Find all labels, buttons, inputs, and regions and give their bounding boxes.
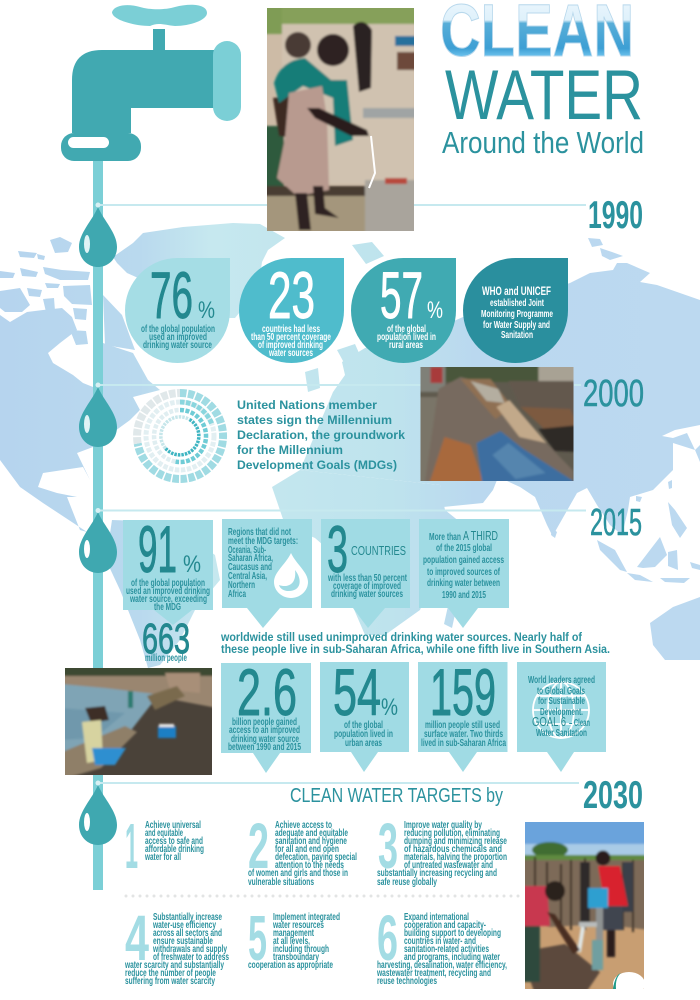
target 4: reduce the number of people xyxy=(125,968,216,979)
text: unimproved sources xyxy=(220,632,610,656)
photo: people washing at lake shore xyxy=(65,668,212,775)
title xyxy=(440,0,644,159)
target 4: withdrawals and supply xyxy=(152,944,227,955)
panel: 2015 stat 91 percent xyxy=(123,512,213,625)
panel: 2015 three countries: drinking water sources xyxy=(331,589,403,600)
target 5: 5 xyxy=(248,902,267,974)
target 3: materials, halving the proportion xyxy=(404,852,507,863)
panel: 2015 global goals: GOAL 6 xyxy=(532,715,566,729)
target 3: substantially increasing recycling and xyxy=(377,868,497,879)
icon: faucet xyxy=(61,5,241,161)
panel: 2015 stat 54 percent: population lived in xyxy=(334,729,393,740)
target 2: defecation, paying special xyxy=(275,852,357,863)
panel: 2015 stat 91 percent: used an improved drinking xyxy=(126,586,210,597)
drop icon 2015 xyxy=(79,508,117,573)
target 6: cooperation and capacity- xyxy=(404,920,486,931)
target 5: water resources xyxy=(272,920,324,931)
panel: 2015 stat 91 percent: of the global population xyxy=(131,578,205,589)
panel: 2015 global goals: World leaders agreed xyxy=(528,675,595,686)
panel: 2015 stat 54 percent: urban areas xyxy=(345,738,382,749)
panel: 2015 stat 91 percent: % xyxy=(183,551,201,578)
panel: 1990 WHO and UNICEF: Sanitation xyxy=(501,330,533,341)
target 4: 4 xyxy=(125,902,149,974)
target 2: of women and girls and those in xyxy=(248,868,348,879)
panel: 2015 stat 54 percent: % xyxy=(381,694,398,721)
panel: 2015 stat 54 percent xyxy=(320,655,409,772)
panel: 1990 WHO and UNICEF: Monitoring Programme xyxy=(481,309,553,320)
panel: 2015 a third: drinking water between xyxy=(427,578,500,589)
target 6 xyxy=(376,902,507,987)
panel: 2015 stat 159 million: surface water. Two thirds xyxy=(424,729,503,740)
target 5 xyxy=(248,902,340,974)
panel: 2015 stat 91 percent: 91 xyxy=(138,512,177,586)
stat: 663 million people: 663 xyxy=(142,615,190,663)
target 1: water for all xyxy=(144,852,181,863)
panel: 2015 global goals: to Global Goals xyxy=(537,686,585,697)
target 5: management xyxy=(273,928,314,939)
target 1 xyxy=(125,810,204,882)
panel: 1990 stat 76 percent: of the global population xyxy=(141,324,215,335)
panel: 2015 stat 2.6 billion: between 1990 and 2015 xyxy=(228,742,301,753)
panel: 1990 stat 57 percent: of the global xyxy=(387,324,426,335)
panel: 2015 global goals xyxy=(517,662,606,772)
panel: 2015 regions: Caucasus and xyxy=(228,562,272,573)
target 5: at all levels, xyxy=(273,936,310,947)
drop icon 2000 xyxy=(79,382,117,447)
panel: 1990 stat 23 countries: than 50 percent coverage xyxy=(251,332,331,343)
year 1990: 1990 xyxy=(588,194,643,237)
panel: 2015 regions: Oceania, Sub- xyxy=(228,545,266,556)
target 2: Achieve access to xyxy=(275,820,332,831)
icon: circular pattern xyxy=(132,388,228,484)
panel: 1990 stat 23 countries: 23 xyxy=(268,258,315,332)
panel: 1990 WHO and UNICEF: WHO and UNICEF xyxy=(482,284,551,298)
panel: 2015 stat 2.6 billion: drinking water source xyxy=(231,734,299,745)
target 1: access to safe and xyxy=(145,836,203,847)
target 6: building support to developing xyxy=(404,928,501,939)
target 6: wastewater treatment, recycling and xyxy=(376,968,491,979)
panel: 2015 three countries: coverage of improved xyxy=(333,581,401,592)
target 4: suffering from water scarcity xyxy=(125,976,215,987)
target 3 xyxy=(377,810,507,888)
target 1: affordable drinking xyxy=(145,844,204,855)
panel: 1990 stat 57 percent: % xyxy=(427,297,443,324)
heading: clean water targets: CLEAN WATER TARGETS by xyxy=(290,784,503,807)
icon: white water drop xyxy=(274,553,308,598)
panel: 1990 stat 57 percent: rural areas xyxy=(389,340,423,351)
panel: 2015 regions: Central Asia, xyxy=(228,571,267,582)
panel: 2015 three countries: 3 xyxy=(327,512,348,586)
panel: 2015 stat 2.6 billion: 2.6 xyxy=(237,655,297,729)
panel: 2015 stat 54 percent: of the global xyxy=(344,720,383,731)
panel: 2015 stat 159 million: lived in sub-Saharan Africa xyxy=(421,738,506,749)
target 4: across all sectors and xyxy=(153,928,222,939)
panel: 2015 regions: Saharan Africa, xyxy=(228,553,273,564)
panel: 2015 stat 2.6 billion xyxy=(221,655,311,773)
icon: globe xyxy=(533,682,589,738)
drop icon 1990 xyxy=(79,202,117,267)
timeline lines xyxy=(98,205,586,783)
panel: 1990 stat 76 percent: 76 xyxy=(150,258,193,332)
text: unimproved sources: these people live in sub-Saharan Africa, while one fifth live in Southern Asia. xyxy=(221,644,610,656)
target 4: Substantially increase xyxy=(153,912,222,923)
target 2: vulnerable situations xyxy=(248,877,314,888)
photo: damaged water pipeline xyxy=(420,367,574,481)
panel: 2015 three countries xyxy=(321,512,410,628)
target 5: including through xyxy=(273,944,329,955)
target 3: safe reuse globally xyxy=(377,877,437,888)
panel: 2015 global goals: for Sustainable xyxy=(538,696,585,707)
panel: 2015 stat 54 percent: 54 xyxy=(333,655,381,729)
panel: 1990 stat 57 percent: population lived in xyxy=(377,332,436,343)
vertical water pipe xyxy=(93,160,103,890)
target 2: for all and end open xyxy=(275,844,339,855)
text: millennium declaration: Declaration, the groundwork xyxy=(237,430,406,442)
target 4: water-use efficiency xyxy=(152,920,216,931)
target 2: adequate and equitable xyxy=(275,828,348,839)
panel: 1990 stat 23 countries: water sources xyxy=(268,348,313,359)
panel: 1990 WHO and UNICEF: for Water Supply and xyxy=(483,320,550,331)
target 4 xyxy=(124,902,229,987)
panel: 1990 stat 23 countries xyxy=(239,258,344,363)
panel: 2015 stat 91 percent: water source, exceeding xyxy=(129,594,207,605)
panel: 2015 regions: meet the MDG targets: xyxy=(228,536,298,547)
target 6: countries in water- and xyxy=(404,936,476,947)
photo: children washing hands at tap xyxy=(267,8,414,231)
target 4: water scarcity and substantially xyxy=(124,960,224,971)
panel: 1990 stat 57 percent xyxy=(351,258,456,363)
target 1: 1 xyxy=(125,810,138,882)
text: unimproved sources: worldwide still used unimproved drinking water sources. Nearly half of xyxy=(220,632,582,644)
panel: 1990 stat 57 percent: 57 xyxy=(380,258,423,332)
panel: 2015 three countries: with less than 50 percent xyxy=(327,573,407,584)
panel: 1990 stat 76 percent: drinking water source xyxy=(143,340,212,351)
year 2030: 2030 xyxy=(583,774,643,817)
target 1: Achieve universal xyxy=(145,820,201,831)
panel: 2015 global goals: Development. xyxy=(540,707,583,718)
panel: 1990 WHO and UNICEF xyxy=(463,258,568,363)
panel: 2015 stat 2.6 billion: access to an improved xyxy=(229,725,300,736)
text: millennium declaration: states sign the Millennium xyxy=(237,415,392,427)
panel: 2015 regions xyxy=(222,519,312,628)
year 2015: 2015 xyxy=(590,502,642,544)
panel: 2015 a third: to improved sources of xyxy=(427,567,500,578)
target 2 xyxy=(248,810,357,888)
target 6: Expand international xyxy=(404,912,469,923)
target 6: harvesting, desalination, water efficiency, xyxy=(377,960,507,971)
target 5: cooperation as appropriate xyxy=(248,960,333,971)
panel: 2015 a third: 1990 and 2015 xyxy=(442,590,486,601)
target 3: 3 xyxy=(378,810,398,882)
target 4: of freshwater to address xyxy=(153,952,229,963)
target 6: reuse technologies xyxy=(377,976,437,987)
panel: 2015 a third: of the 2015 global xyxy=(436,543,492,554)
title: water: WATER xyxy=(445,57,643,135)
text: millennium declaration xyxy=(237,400,406,472)
panel: 1990 stat 76 percent: used an improved xyxy=(149,332,207,343)
target 2: attention to the needs xyxy=(275,860,344,871)
target 6: sanitation-related activities xyxy=(404,944,489,955)
target 5: Implement integrated xyxy=(273,912,340,923)
panel: 2015 a third: More than xyxy=(429,532,461,543)
panel: 1990 stat 23 countries: countries had less xyxy=(262,324,320,335)
stat: 663 million people: million people xyxy=(145,653,187,664)
target 3: of hazardous chemicals and xyxy=(404,844,502,855)
panel: 2015 global goals: – Clean xyxy=(569,718,590,729)
panel: 2015 stat 91 percent: the MDG xyxy=(154,602,181,613)
panel: 2015 regions: Northern xyxy=(228,580,255,591)
panel: 1990 stat 76 percent xyxy=(125,258,230,363)
text: millennium declaration: United Nations member xyxy=(237,400,378,412)
panel: 1990 WHO and UNICEF: established Joint xyxy=(490,298,544,309)
target 4: ensure sustainable xyxy=(153,936,213,947)
panel: 2015 global goals: Water Sanitation xyxy=(536,728,587,739)
panel: 1990 stat 23 countries: of improved drinking xyxy=(258,340,323,351)
subtitle: Around the World xyxy=(442,125,644,159)
target 3: reducing pollution, eliminating xyxy=(404,828,500,839)
target 6: and programs, including water xyxy=(404,952,500,963)
panel: 2015 stat 159 million: 159 xyxy=(430,655,496,729)
year 2000: 2000 xyxy=(583,373,644,415)
stat: 663 million people xyxy=(142,615,190,664)
target 3: of untreated wastewater and xyxy=(404,860,493,871)
target 6: 6 xyxy=(377,902,398,974)
target 3: Improve water quality by xyxy=(404,820,482,831)
panel: 2015 regions: Africa xyxy=(228,589,246,600)
target 3: dumping and minimizing release xyxy=(404,836,507,847)
panel: 2015 a third: A THIRD xyxy=(463,529,498,543)
drop icon 2030 xyxy=(79,780,117,845)
photo: children at hand pump xyxy=(525,822,644,989)
target 1: and equitable xyxy=(145,828,183,839)
panel: 2015 stat 2.6 billion: billion people gained xyxy=(232,717,297,728)
panel: 2015 stat 159 million: million people still used xyxy=(425,720,500,731)
panel: 2015 a third xyxy=(419,519,509,628)
panel: 2015 stat 159 million xyxy=(418,655,508,772)
panel: 2015 a third: population gained access xyxy=(423,555,504,566)
target 2: 2 xyxy=(248,810,269,882)
target 2: sanitation and hygiene xyxy=(275,836,347,847)
panel: 2015 three countries: COUNTRIES xyxy=(351,543,406,558)
panel: 1990 stat 76 percent: % xyxy=(198,297,215,324)
background world map xyxy=(0,223,700,668)
panel: 2015 regions: Regions that did not xyxy=(228,527,291,538)
text: millennium declaration: for the Millennium xyxy=(237,445,343,457)
target 5: transboundary xyxy=(273,952,319,963)
text: millennium declaration: Development Goals (MDGs) xyxy=(237,460,397,472)
